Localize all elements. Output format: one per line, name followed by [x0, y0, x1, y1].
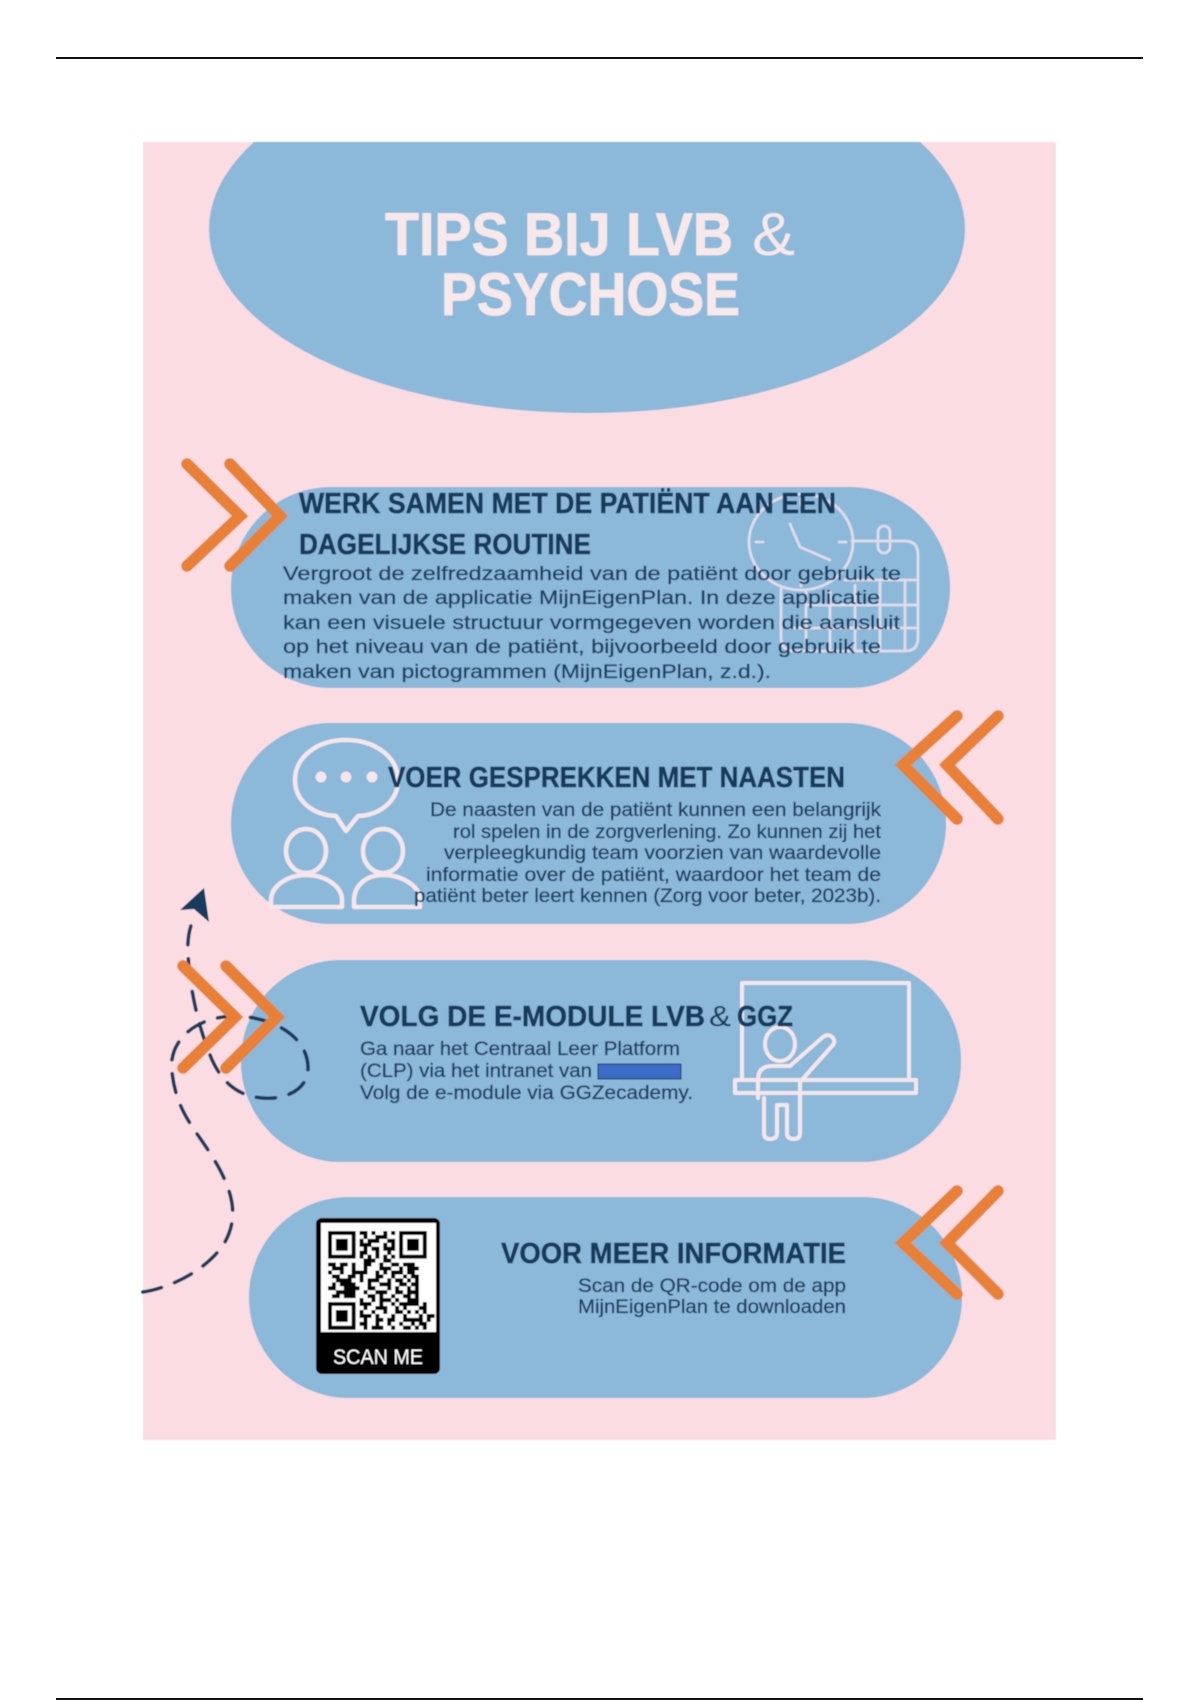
body text: informatie over de patiënt, waardoor het team de	[426, 864, 881, 886]
title ellipse	[208, 141, 966, 414]
body text: Volg de e-module via GGZecademy.	[360, 1082, 693, 1104]
body text	[283, 563, 901, 683]
heading: GGZ	[737, 1001, 793, 1033]
chevrons: routine panel	[187, 464, 280, 566]
redaction block	[598, 1064, 681, 1079]
body text: rol spelen in de zorgverlening. Zo kunnen zij het	[453, 821, 882, 843]
title: PSYCHOSE	[441, 261, 740, 328]
body text: op het niveau van de patiënt, bijvoorbeeld door gebruik te	[283, 636, 881, 658]
arrowhead	[180, 888, 209, 922]
title	[385, 201, 795, 328]
heading: &	[709, 1001, 731, 1033]
title: TIPS BIJ LVB	[385, 201, 733, 268]
chevrons: e-module panel	[183, 966, 277, 1068]
icon: clock and calendar	[749, 494, 918, 651]
heading	[299, 487, 836, 561]
chevrons: more information panel	[903, 1191, 998, 1294]
body text: kan een visuele structuur vormgegeven worden die aansluit	[283, 612, 901, 634]
body text: verpleegkundig team voorzien van waardevolle	[444, 842, 881, 864]
icon: teacher at board	[735, 983, 916, 1139]
poster panel	[143, 45, 1056, 1440]
body text: Vergroot de zelfredzaamheid van de patiënt door gebruik te	[283, 563, 901, 585]
heading: VOOR MEER INFORMATIE	[501, 1238, 846, 1270]
panel: e-module	[241, 960, 961, 1162]
body text: MijnEigenPlan te downloaden	[578, 1296, 846, 1318]
panel: more information	[249, 1197, 962, 1398]
QR code	[316, 1218, 440, 1374]
body text	[578, 1275, 846, 1318]
title: &	[752, 201, 795, 268]
body text	[414, 799, 882, 907]
body text: patiënt beter leert kennen (Zorg voor beter, 2023b).	[414, 885, 881, 907]
body text: Scan de QR-code om de app	[578, 1275, 846, 1297]
heading: DAGELIJKSE ROUTINE	[299, 529, 591, 561]
chevrons: conversations panel	[903, 716, 998, 819]
bottom rule	[56, 1698, 1143, 1700]
QR code: SCAN ME	[333, 1346, 423, 1369]
heading: VOER GESPREKKEN MET NAASTEN	[388, 762, 845, 794]
body text: Ga naar het Centraal Leer Platform	[360, 1038, 680, 1060]
top rule	[56, 57, 1143, 59]
panel: conversations	[231, 723, 946, 924]
body text: maken van pictogrammen (MijnEigenPlan, z.d.).	[283, 661, 771, 683]
panel: daily routine	[231, 487, 950, 688]
body text: De naasten van de patiënt kunnen een belangrijk	[430, 799, 881, 821]
body text	[360, 1038, 693, 1104]
body text: (CLP) via het intranet van	[360, 1060, 592, 1082]
body text: maken van de applicatie MijnEigenPlan. In deze applicatie	[283, 587, 880, 609]
heading: WERK SAMEN MET DE PATIËNT AAN EEN	[299, 487, 836, 520]
dashed arrow	[143, 888, 308, 1292]
heading: VOLG DE E-MODULE LVB	[360, 1001, 705, 1033]
icon: speech bubble and two people	[271, 740, 420, 907]
